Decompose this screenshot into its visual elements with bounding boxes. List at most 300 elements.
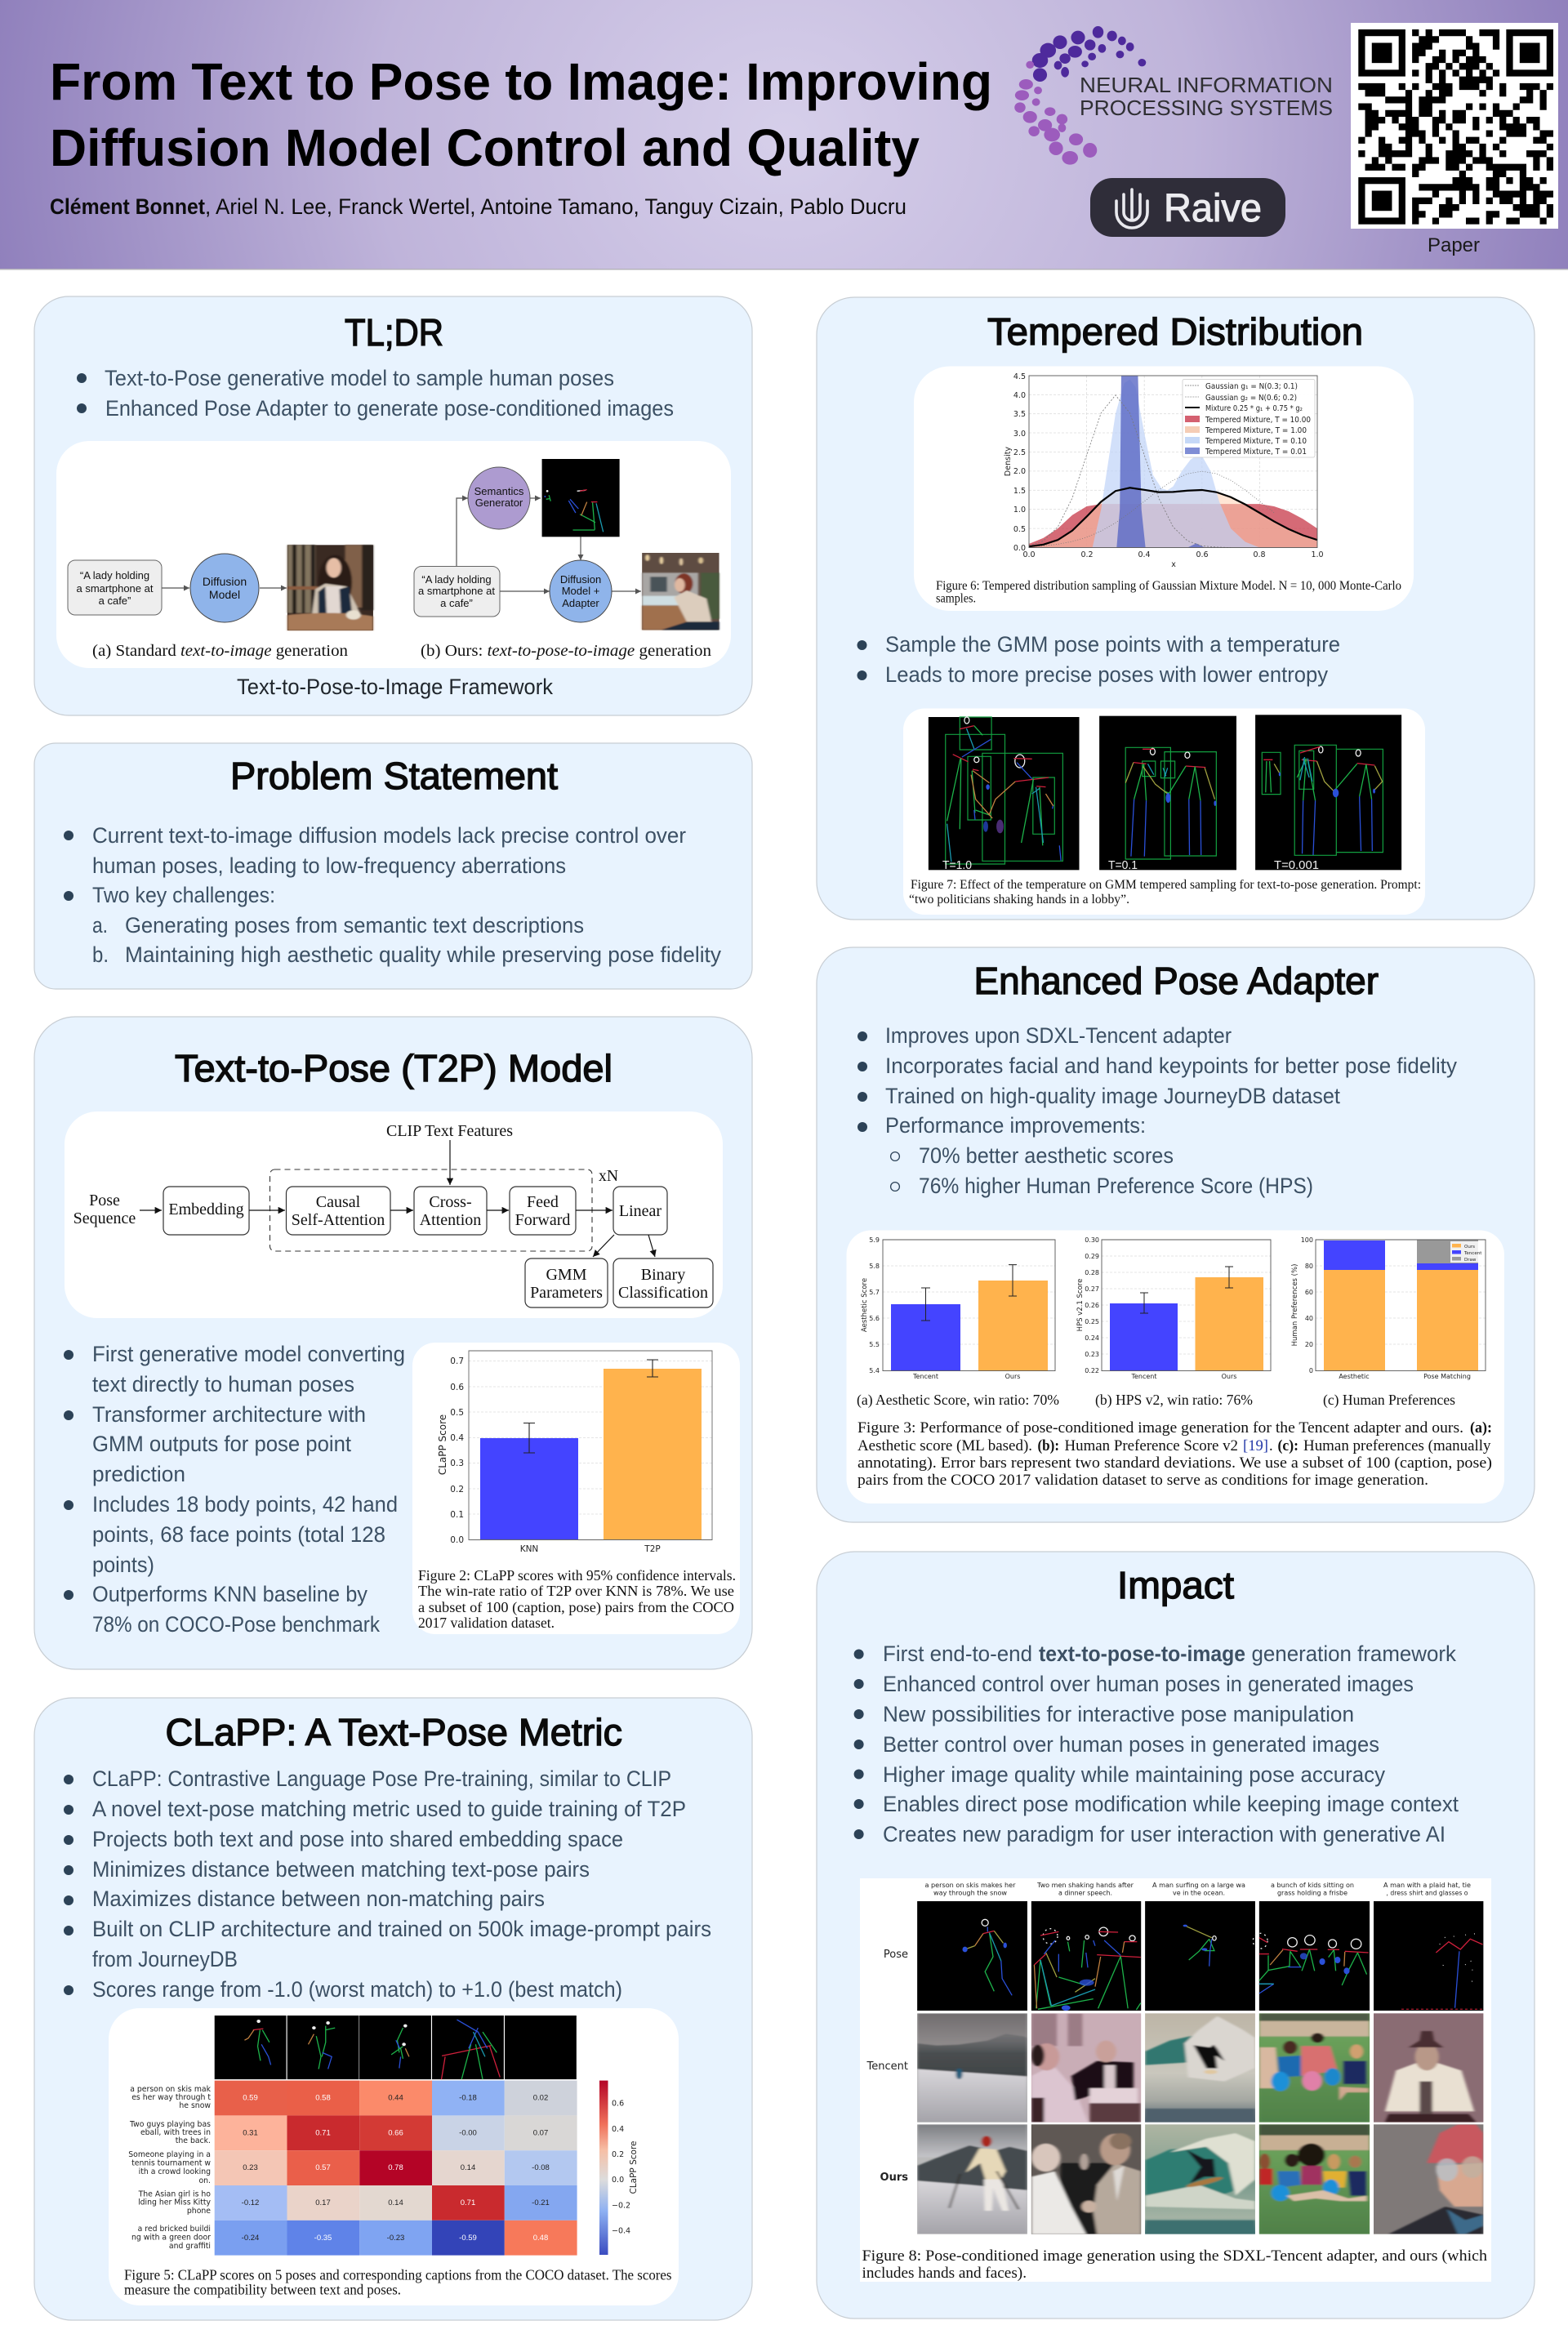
panel: Impact bbox=[817, 1552, 1535, 2319]
bullet list: text directly to human poses bbox=[92, 1372, 354, 1396]
bar chart: CLaPP scores: 0.4 bbox=[450, 1433, 464, 1443]
bullet list bbox=[64, 1342, 405, 1637]
bullet list bbox=[64, 1766, 711, 2002]
bullet list: First end-to-end bbox=[883, 1642, 1032, 1666]
panel: CLaPP metric bbox=[34, 1698, 752, 2320]
chart legend: Mixture 0.25 * g₁ + 0.75 * g₂ bbox=[1205, 404, 1303, 413]
figure: framework diagram bbox=[56, 441, 731, 668]
bullet list: points) bbox=[92, 1552, 154, 1577]
figure caption: pairs from the COCO 2017 validation dataset to serve as conditions for image generation. bbox=[858, 1472, 1428, 1489]
bullet list: Outperforms KNN baseline by bbox=[92, 1582, 368, 1606]
heatmap: 0.59 bbox=[243, 2094, 258, 2102]
bullet list: b. bbox=[92, 942, 109, 967]
Tencent man bbox=[1385, 2062, 1474, 2111]
Ours men bbox=[1061, 2163, 1111, 2234]
axis labels: 1.0 bbox=[1013, 506, 1026, 514]
bar chart a: aesthetic score: 5.4 bbox=[869, 1367, 880, 1374]
axis labels c: Human Preferences (%) bbox=[1291, 1264, 1299, 1346]
axis labels c: Pose Matching bbox=[1423, 1373, 1471, 1380]
architecture diagram: Embedding bbox=[168, 1200, 244, 1218]
QR code bbox=[1351, 23, 1558, 229]
heading: TL;DR bbox=[345, 311, 443, 354]
architecture diagram: Forward bbox=[515, 1211, 570, 1229]
logo: Raive bbox=[1090, 178, 1285, 237]
colorbar: CLaPP Score bbox=[629, 2140, 639, 2194]
bullet list: Sample the GMM pose points with a temperature bbox=[885, 632, 1340, 657]
figure caption: Human preferences (manually bbox=[1303, 1438, 1491, 1454]
architecture diagram: Attention bbox=[420, 1211, 481, 1229]
axis labels c: Aesthetic bbox=[1339, 1373, 1370, 1380]
bar chart b: HPS score: 0.27 bbox=[1085, 1285, 1099, 1293]
heading: Impact bbox=[1117, 1564, 1234, 1606]
bar chart b: HPS score: 0.24 bbox=[1085, 1334, 1099, 1342]
diagram b: text-to-pose-to-image: Generator bbox=[475, 497, 523, 509]
axis labels: 3.5 bbox=[1013, 410, 1026, 419]
figure caption: Aesthetic score (ML based). bbox=[858, 1438, 1032, 1454]
heatmap row labels: a person on skis mak bbox=[130, 2085, 212, 2094]
bar chart b: HPS score: 0.30 bbox=[1085, 1236, 1099, 1244]
heatmap: 0.02 bbox=[533, 2094, 548, 2102]
heatmap bbox=[128, 2081, 577, 2256]
axis labels c: 20 bbox=[1305, 1341, 1313, 1348]
figure caption: The win-rate ratio of T2P over KNN is 78%. We use bbox=[418, 1583, 734, 1599]
heading: Text-to-Pose (T2P) Model bbox=[175, 1047, 612, 1089]
bar chart a: aesthetic score: Ours bbox=[1005, 1373, 1020, 1380]
heatmap: -0.00 bbox=[459, 2128, 477, 2138]
Ours man bbox=[1427, 2124, 1483, 2163]
bullet list: GMM outputs for pose point bbox=[92, 1432, 351, 1456]
axis labels c bbox=[1291, 1236, 1471, 1380]
figure caption: Figure 3: Performance of pose-conditioned image generation for the Tencent adapter and ours. bbox=[858, 1420, 1463, 1437]
heatmap: 0.71 bbox=[461, 2198, 475, 2207]
axis labels: 1.0 bbox=[1311, 550, 1324, 559]
architecture diagram: xN bbox=[599, 1167, 618, 1185]
architecture diagram bbox=[65, 1111, 723, 1318]
chart legend: Tencent bbox=[1463, 1251, 1482, 1256]
figure caption: measure the compatibility between text and poses. bbox=[124, 2282, 401, 2298]
heading: Problem Statement bbox=[230, 755, 558, 797]
architecture diagram: GMM bbox=[546, 1266, 587, 1284]
bar chart: CLaPP scores: 0.7 bbox=[450, 1356, 464, 1366]
bar chart a: aesthetic score: 5.8 bbox=[869, 1263, 880, 1270]
bar chart b: HPS score: HPS v2.1 Score bbox=[1076, 1279, 1085, 1331]
axis labels c: 80 bbox=[1305, 1263, 1313, 1270]
header banner bbox=[0, 0, 1568, 270]
heatmap row labels: a red bricked buildi bbox=[138, 2225, 211, 2234]
bullet list: Enhanced control over human poses in generated images bbox=[883, 1672, 1414, 1696]
bar chart b: HPS score: Tencent bbox=[1130, 1373, 1157, 1380]
figure caption: samples. bbox=[936, 591, 976, 606]
pose row bbox=[917, 1901, 1483, 2011]
chart legend: Gaussian g₂ = N(0.6; 0.2) bbox=[1205, 394, 1297, 403]
bullet list: Includes 18 body points, 42 hand bbox=[92, 1492, 398, 1517]
figure caption: Figure 6: Tempered distribution sampling of Gaussian Mixture Model. N = 10, 000 Monte-Carlo bbox=[936, 579, 1401, 593]
axis labels: 0.0 bbox=[1013, 544, 1026, 553]
bar chart: CLaPP scores: CLaPP Score bbox=[437, 1414, 448, 1475]
bullet list: Scores range from -1.0 (worst match) to +1.0 (best match) bbox=[92, 1977, 622, 2002]
bar chart a: aesthetic score: 5.6 bbox=[869, 1315, 880, 1322]
axis labels: 3.0 bbox=[1013, 430, 1026, 439]
bullet list bbox=[858, 1023, 1457, 1198]
architecture diagram: Causal bbox=[316, 1193, 361, 1211]
diagram b: text-to-pose-to-image: “A lady holding bbox=[421, 573, 492, 586]
panel labels bbox=[942, 858, 1319, 872]
bullet list: human poses, leading to low-frequency aberrations bbox=[92, 853, 566, 878]
architecture diagram: Parameters bbox=[530, 1284, 603, 1302]
bullet list: 78% on COCO-Pose benchmark bbox=[92, 1612, 380, 1637]
diagram a: standard text-to-image: a cafe” bbox=[99, 595, 131, 607]
column captions: way through the snow bbox=[933, 1890, 1007, 1896]
figure caption: . bbox=[1269, 1438, 1273, 1454]
figure caption: “two politicians shaking hands in a lobby”. bbox=[909, 893, 1129, 906]
axis labels: 0.4 bbox=[1138, 550, 1151, 559]
panel: TL;DR bbox=[34, 296, 752, 715]
title: Diffusion Model Control and Quality bbox=[50, 118, 920, 177]
axis labels c: 100 bbox=[1301, 1236, 1313, 1244]
heatmap: 0.44 bbox=[388, 2094, 403, 2102]
column captions: a person on skis makes her bbox=[924, 1882, 1016, 1889]
architecture diagram: Feed bbox=[527, 1193, 559, 1211]
diagram b: text-to-pose-to-image: Adapter bbox=[562, 597, 599, 609]
logo text: Neural Information Processing Systems: PROCESSING SYSTEMS bbox=[1080, 96, 1333, 120]
axis labels c: 0 bbox=[1309, 1367, 1313, 1374]
figure caption: includes hands and faces). bbox=[862, 2265, 1027, 2282]
sub-captions: (b) HPS v2, win ratio: 76% bbox=[1095, 1392, 1253, 1409]
heatmap: 0.66 bbox=[388, 2128, 403, 2138]
bar chart c: human preferences bbox=[1316, 1240, 1486, 1371]
bullet list: Two key challenges: bbox=[92, 883, 275, 907]
bar chart: CLaPP scores: T2P bbox=[644, 1544, 661, 1554]
figure: pose-conditioned generation grid bbox=[860, 1878, 1491, 2282]
diagram b: text-to-pose-to-image: Semantics bbox=[474, 485, 524, 497]
heatmap row labels: eball, with trees in bbox=[140, 2128, 211, 2137]
heatmap: -0.24 bbox=[242, 2234, 259, 2243]
bullet list: First generative model converting bbox=[92, 1342, 405, 1366]
sub-captions: (a) Aesthetic Score, win ratio: 70% bbox=[857, 1392, 1059, 1409]
column captions: , dress shirt and glasses o bbox=[1387, 1890, 1468, 1896]
figure caption bbox=[124, 2267, 671, 2298]
heading: Tempered Distribution bbox=[987, 310, 1363, 353]
architecture diagram: Linear bbox=[619, 1202, 662, 1220]
diagram b: text-to-pose-to-image: a smartphone at bbox=[418, 585, 495, 597]
axis labels c: 40 bbox=[1305, 1315, 1313, 1322]
bullet list: Enhanced Pose Adapter to generate pose-conditioned images bbox=[105, 396, 674, 421]
axis labels: 0.0 bbox=[1022, 550, 1036, 559]
bar chart b: HPS score bbox=[1076, 1236, 1271, 1380]
bullet list: generation framework bbox=[1251, 1642, 1456, 1666]
panel: Enhanced Pose Adapter bbox=[817, 947, 1535, 1522]
column captions: Two men shaking hands after bbox=[1036, 1882, 1134, 1889]
figure caption: (a): bbox=[1470, 1420, 1492, 1437]
Tencent surf bbox=[1145, 2035, 1196, 2065]
bar chart: CLaPP scores: KNN bbox=[520, 1544, 538, 1554]
row labels: Pose bbox=[884, 1949, 908, 1961]
heatmap: 0.71 bbox=[315, 2128, 331, 2138]
heatmap row labels: tennis tournament w bbox=[131, 2159, 211, 2167]
heatmap: -0.18 bbox=[459, 2094, 477, 2102]
axis labels: 2.0 bbox=[1013, 467, 1026, 476]
axis labels: 4.0 bbox=[1013, 391, 1026, 400]
figure: temperature pose samples bbox=[903, 709, 1425, 915]
column captions: A man with a plaid hat, tie bbox=[1383, 1882, 1471, 1889]
figure caption bbox=[909, 878, 1421, 906]
axis labels: 0.6 bbox=[1196, 550, 1209, 559]
colorbar: 0.6 bbox=[612, 2099, 624, 2109]
axis labels: 0.8 bbox=[1253, 550, 1266, 559]
bullet list: Generating poses from semantic text descriptions bbox=[125, 913, 584, 938]
bullet list: Incorporates facial and hand keypoints for better pose fidelity bbox=[885, 1054, 1457, 1078]
bullet list bbox=[858, 632, 1340, 687]
bar chart: CLaPP scores bbox=[412, 1343, 740, 1634]
bullet list bbox=[854, 1642, 1459, 1846]
bar chart a: aesthetic score: Tencent bbox=[912, 1373, 938, 1380]
diagram a: standard text-to-image: Diffusion bbox=[203, 575, 247, 588]
photo: woman in cafe on phone bbox=[287, 545, 373, 630]
heatmap row labels: and graffiti bbox=[169, 2242, 211, 2251]
diagram b: text-to-pose-to-image bbox=[414, 467, 641, 622]
sub-captions: (c) Human Preferences bbox=[1323, 1392, 1455, 1409]
diagram b: text-to-pose-to-image: Diffusion bbox=[560, 573, 601, 586]
heatmap: -0.23 bbox=[387, 2234, 404, 2243]
image: pose skeleton bbox=[542, 459, 620, 537]
heatmap: -0.12 bbox=[242, 2198, 259, 2207]
figure caption: annotating). Error bars represent two standard deviations. We use a subset of 100 (caption, pose) bbox=[858, 1455, 1492, 1472]
figure caption: (c): bbox=[1277, 1438, 1298, 1454]
architecture diagram: Self-Attention bbox=[292, 1211, 385, 1229]
bullet list: a. bbox=[92, 913, 108, 938]
heatmap row labels: he snow bbox=[179, 2101, 211, 2110]
bullet list: CLaPP: Contrastive Language Pose Pre-training, similar to CLIP bbox=[92, 1766, 671, 1791]
architecture diagram: Pose bbox=[89, 1192, 120, 1209]
axis labels: 4.5 bbox=[1013, 372, 1026, 381]
bullet list: Improves upon SDXL-Tencent adapter bbox=[885, 1023, 1232, 1048]
heatmap row labels: on. bbox=[198, 2176, 211, 2185]
diagram a: standard text-to-image: a smartphone at bbox=[77, 582, 154, 595]
panel: Tempered Distribution bbox=[817, 297, 1535, 920]
heatmap: 0.58 bbox=[315, 2094, 331, 2102]
column captions: A man surfing on a large wa bbox=[1152, 1882, 1245, 1889]
architecture diagram: Classification bbox=[618, 1284, 708, 1302]
title bbox=[50, 52, 992, 177]
bullet list: Performance improvements: bbox=[885, 1113, 1146, 1138]
bullet list: Leads to more precise poses with lower entropy bbox=[885, 662, 1328, 687]
heatmap: 0.57 bbox=[315, 2163, 331, 2172]
column captions: ve in the ocean. bbox=[1173, 1890, 1225, 1896]
figure caption bbox=[936, 579, 1401, 606]
bar chart a: aesthetic score: 5.9 bbox=[869, 1236, 880, 1244]
panel: Text-to-Pose Model bbox=[34, 1017, 752, 1669]
colorbar: −0.2 bbox=[612, 2202, 630, 2210]
bar chart a: aesthetic score: 5.7 bbox=[869, 1289, 880, 1296]
axis labels bbox=[1004, 372, 1324, 569]
bullet list: from JourneyDB bbox=[92, 1947, 238, 1971]
heading: Enhanced Pose Adapter bbox=[973, 960, 1379, 1002]
architecture diagram: Cross- bbox=[429, 1193, 472, 1211]
figure caption bbox=[418, 1567, 736, 1631]
bullet list: Creates new paradigm for user interaction with generative AI bbox=[883, 1822, 1446, 1846]
column captions bbox=[924, 1882, 1471, 1896]
diagram a: standard text-to-image: Model bbox=[209, 588, 240, 601]
heatmap row labels: phone bbox=[187, 2207, 211, 2216]
row labels: Tencent bbox=[866, 2060, 908, 2073]
logo: Raive: Raive bbox=[1164, 187, 1262, 230]
heatmap row labels: Someone playing in a bbox=[128, 2150, 211, 2159]
bullet list: Transformer architecture with bbox=[92, 1402, 366, 1427]
bar chart b: HPS score: 0.28 bbox=[1085, 1269, 1099, 1276]
axis labels: 1.5 bbox=[1013, 487, 1026, 496]
bullet list: New possibilities for interactive pose manipulation bbox=[883, 1702, 1354, 1726]
row labels: Ours bbox=[880, 2172, 908, 2184]
bullet list: Built on CLIP architecture and trained on 500k image-prompt pairs bbox=[92, 1917, 711, 1941]
figure caption: Figure 8: Pose-conditioned image generation using the SDXL-Tencent adapter, and ours (which bbox=[862, 2247, 1488, 2265]
figure caption: Figure 7: Effect of the temperature on GMM tempered sampling for text-to-pose generation. Prompt: bbox=[911, 878, 1421, 892]
architecture diagram: Sequence bbox=[74, 1209, 136, 1227]
bullet list bbox=[64, 823, 721, 967]
figure captions: (b) Ours: text-to-pose-to-image generation bbox=[421, 642, 711, 660]
colorbar: 0.4 bbox=[612, 2125, 624, 2134]
figure: adapter performance charts bbox=[846, 1230, 1504, 1503]
icon: NeurIPS dotted arc bbox=[1014, 26, 1146, 165]
heatmap row labels: ng with a green door bbox=[131, 2233, 211, 2243]
Tencent kids bbox=[1259, 2013, 1370, 2037]
heading: CLaPP: A Text-Pose Metric bbox=[165, 1711, 622, 1753]
bullet list: A novel text-pose matching metric used to guide training of T2P bbox=[92, 1797, 686, 1821]
bar chart: CLaPP scores: 0.6 bbox=[450, 1383, 464, 1392]
colorbar: −0.4 bbox=[612, 2226, 630, 2236]
bar chart: CLaPP scores: 0.0 bbox=[450, 1535, 464, 1545]
pose thumbnails bbox=[215, 2016, 577, 2079]
figure caption: Human Preference Score v2 bbox=[1065, 1438, 1238, 1454]
bar chart b: HPS score: 0.25 bbox=[1085, 1318, 1099, 1325]
figure caption: Figure 5: CLaPP scores on 5 poses and corresponding captions from the COCO dataset. The scores bbox=[124, 2267, 671, 2283]
bullet list: Text-to-Pose generative model to sample human poses bbox=[105, 366, 614, 390]
bar chart a: aesthetic score bbox=[861, 1236, 1055, 1380]
authors: , Ariel N. Lee, Franck Wertel, Antoine Tamano, Tanguy Cizain, Pablo Ducru bbox=[205, 194, 906, 219]
colorbar: 0.0 bbox=[612, 2176, 624, 2185]
heatmap: 0.31 bbox=[243, 2128, 258, 2138]
chart legend bbox=[1450, 1241, 1482, 1263]
bullet list bbox=[77, 366, 674, 421]
bar chart b: HPS score: 0.26 bbox=[1085, 1302, 1099, 1309]
figure caption: framework: Text-to-Pose-to-Image Framework bbox=[237, 675, 553, 699]
panel labels: T=1.0 bbox=[942, 858, 972, 872]
bar chart b: HPS score: Ours bbox=[1222, 1373, 1236, 1380]
Ours ski bbox=[917, 2124, 1027, 2157]
axis labels: x bbox=[1171, 560, 1176, 569]
bullet list: Higher image quality while maintaining pose accuracy bbox=[883, 1762, 1385, 1787]
bar chart a: aesthetic score: 5.5 bbox=[869, 1341, 880, 1348]
bullet list: Maximizes distance between non-matching pairs bbox=[92, 1886, 545, 1911]
chart legend: Gaussian g₁ = N(0.3; 0.1) bbox=[1205, 382, 1298, 391]
bullet list: prediction bbox=[92, 1462, 185, 1486]
heatmap row labels: The Asian girl is ho bbox=[138, 2190, 211, 2198]
axis labels: Density bbox=[1004, 447, 1013, 476]
heatmap: -0.35 bbox=[314, 2234, 332, 2243]
figure caption bbox=[858, 1420, 1492, 1489]
heatmap: 0.48 bbox=[533, 2234, 548, 2243]
chart: tempered mixture density bbox=[914, 366, 1414, 611]
diagram b: text-to-pose-to-image: a cafe” bbox=[440, 597, 473, 609]
row labels bbox=[866, 1949, 908, 2184]
QR caption: Paper bbox=[1428, 234, 1480, 256]
Tencent ski bbox=[917, 2014, 1027, 2047]
heatmap row labels bbox=[128, 2085, 212, 2251]
bar chart: CLaPP scores: 0.3 bbox=[450, 1459, 464, 1468]
bullet list: Current text-to-image diffusion models lack precise control over bbox=[92, 823, 686, 848]
heatmap row labels: Two guys playing bas bbox=[129, 2120, 211, 2129]
figure caption: a subset of 100 (caption, pose) pairs from the COCO bbox=[418, 1599, 734, 1616]
figure caption bbox=[862, 2247, 1488, 2282]
chart legend bbox=[1183, 379, 1315, 457]
bullet list: Enables direct pose modification while keeping image context bbox=[883, 1792, 1459, 1816]
bar chart b: HPS score: 0.23 bbox=[1085, 1351, 1099, 1358]
colorbar: 0.2 bbox=[612, 2150, 624, 2159]
heatmap: 0.17 bbox=[315, 2198, 331, 2207]
chart legend: Tempered Mixture, T = 1.00 bbox=[1205, 426, 1307, 435]
bar chart b: HPS score: 0.22 bbox=[1085, 1367, 1099, 1374]
axis labels: 2.5 bbox=[1013, 448, 1026, 457]
heatmap: 0.78 bbox=[388, 2163, 403, 2172]
diagram a: standard text-to-image: “A lady holding bbox=[80, 569, 149, 581]
figure captions bbox=[92, 642, 711, 660]
heatmap row labels: ith a crowd looking bbox=[139, 2167, 211, 2176]
figure caption: 2017 validation dataset. bbox=[418, 1615, 555, 1631]
chart legend: Tempered Mixture, T = 10.00 bbox=[1205, 416, 1311, 425]
bullet list: Minimizes distance between matching text-pose pairs bbox=[92, 1857, 590, 1882]
diagram b: text-to-pose-to-image: Model + bbox=[562, 585, 599, 597]
bullet list: Projects both text and pose into shared embedding space bbox=[92, 1827, 623, 1851]
figure caption: Figure 2: CLaPP scores with 95% confidence intervals. bbox=[418, 1567, 736, 1584]
bullet list: Maintaining high aesthetic quality while preserving pose fidelity bbox=[125, 942, 721, 967]
heatmap row labels: es her way through t bbox=[131, 2093, 211, 2102]
architecture diagram: Binary bbox=[641, 1266, 685, 1284]
Ours kids bbox=[1259, 2135, 1370, 2151]
pose images T=1.0, T=0.1, T=0.001 bbox=[929, 715, 1401, 870]
heatmap: 0.23 bbox=[243, 2163, 258, 2172]
column captions: a bunch of kids sitting on bbox=[1271, 1882, 1354, 1889]
heatmap: 0.14 bbox=[388, 2198, 403, 2207]
logo text: Neural Information Processing Systems bbox=[1080, 73, 1333, 120]
colorbar bbox=[599, 2081, 639, 2255]
heatmap row labels: the back. bbox=[176, 2136, 211, 2145]
chart legend: Tempered Mixture, T = 0.01 bbox=[1205, 448, 1307, 457]
figure: CLaPP heatmap bbox=[109, 2008, 679, 2305]
heatmap: -0.21 bbox=[532, 2198, 550, 2207]
column captions: a dinner speech. bbox=[1058, 1890, 1112, 1896]
chart legend: Draw bbox=[1464, 1258, 1477, 1263]
axis labels: 0.5 bbox=[1013, 525, 1026, 534]
panel: Problem Statement bbox=[34, 743, 752, 989]
figure caption: [19] bbox=[1243, 1438, 1268, 1454]
Tencent dinner bbox=[1031, 2013, 1082, 2046]
bar chart: CLaPP scores: 0.5 bbox=[450, 1408, 464, 1418]
authors: Clément Bonnet bbox=[50, 194, 205, 219]
bullet list: 76% higher Human Preference Score (HPS) bbox=[919, 1174, 1313, 1198]
sub-captions bbox=[857, 1392, 1455, 1409]
photo: woman at cafe table with phone bbox=[642, 553, 719, 630]
column captions: grass holding a frisbe bbox=[1277, 1890, 1348, 1896]
logo text: Neural Information Processing Systems: NEURAL INFORMATION bbox=[1080, 73, 1333, 97]
architecture diagram: CLIP Text Features bbox=[386, 1122, 513, 1140]
bullet list: text-to-pose-to-image bbox=[1039, 1642, 1245, 1666]
Ours surf bbox=[1145, 2146, 1235, 2195]
bullet list: points, 68 face points (total 128 bbox=[92, 1522, 385, 1547]
figure caption: (b): bbox=[1037, 1438, 1059, 1454]
bar chart a: aesthetic score: Aesthetic Score bbox=[861, 1278, 869, 1332]
panel labels: T=0.1 bbox=[1108, 858, 1138, 872]
heatmap: -0.59 bbox=[459, 2234, 477, 2243]
title: From Text to Pose to Image: Improving bbox=[50, 52, 992, 111]
